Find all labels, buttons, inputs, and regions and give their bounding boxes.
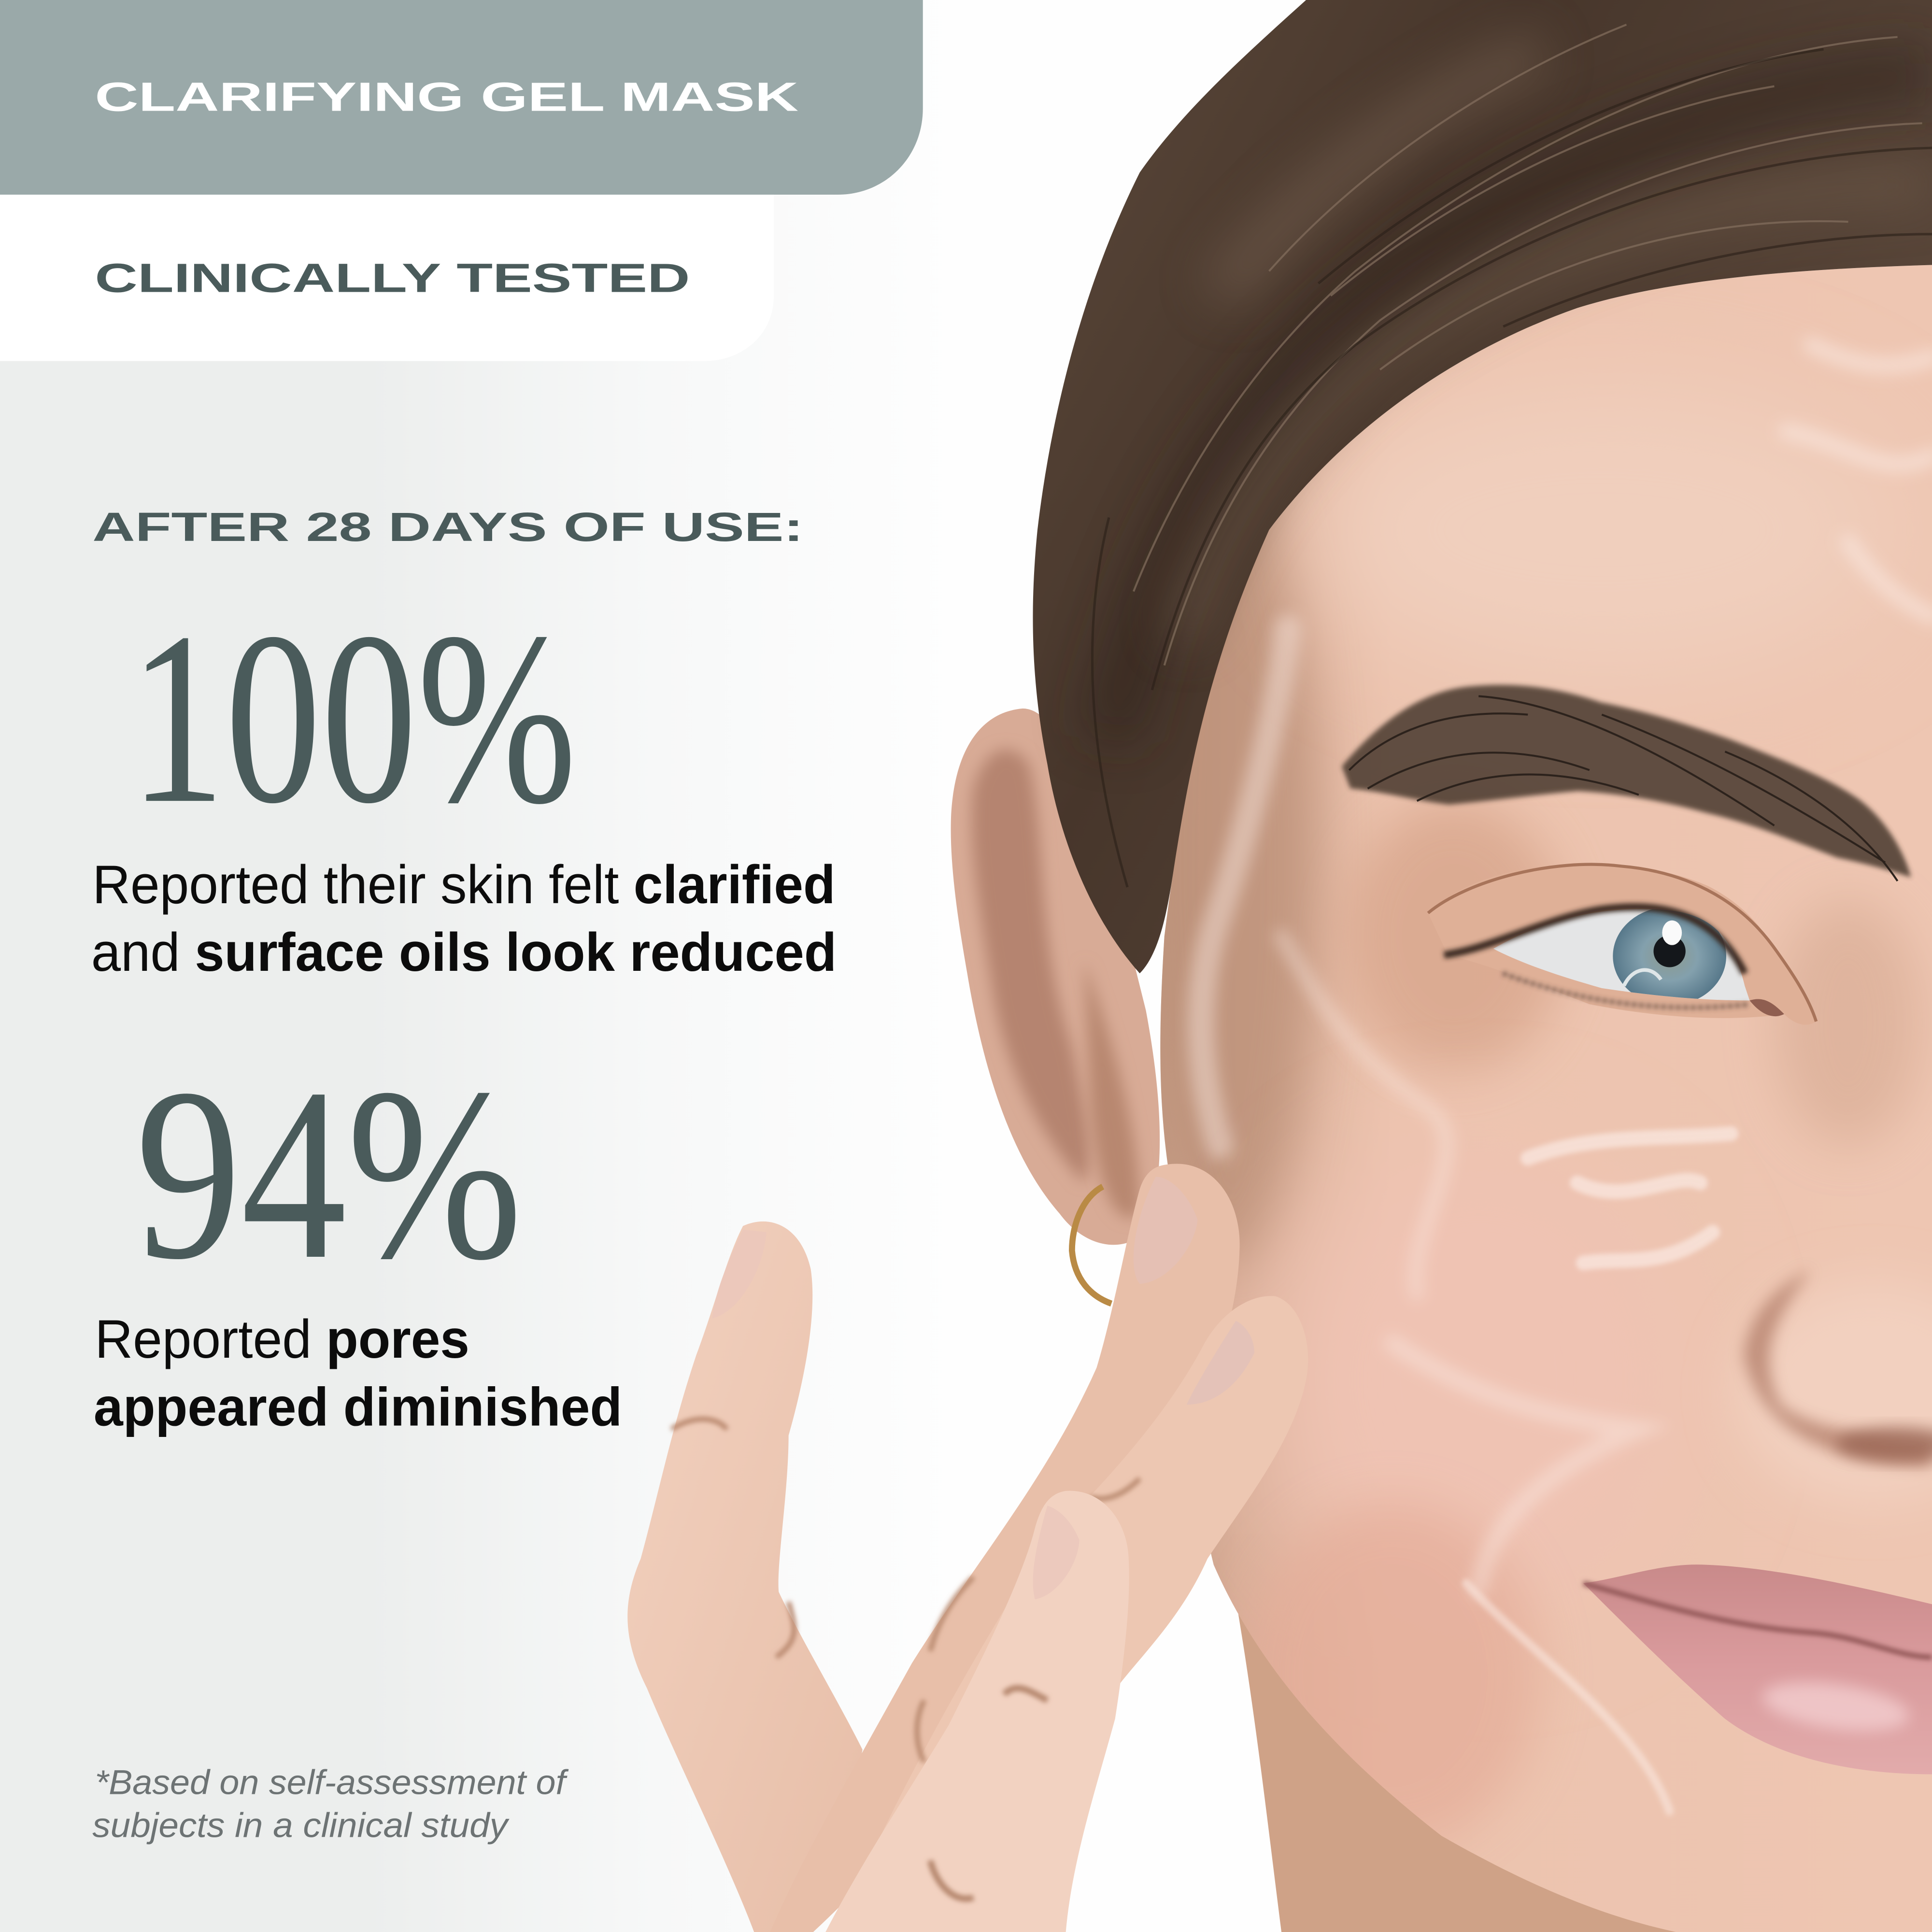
- earring: [1072, 1187, 1111, 1304]
- eyebrow: [1342, 685, 1911, 881]
- text: 94 percent description: [94, 1308, 622, 1437]
- index finger and palm: [627, 1222, 863, 1932]
- face skin: [1146, 265, 1932, 1932]
- lips: [1583, 1564, 1932, 1774]
- heading: clinically tested: CLINICALLY TESTED: [95, 256, 690, 301]
- heading: clarifying gel mask: CLARIFYING GEL MASK: [95, 74, 798, 120]
- hand: [627, 1164, 1308, 1932]
- footnote: subjects in a clinical study: [92, 1806, 510, 1845]
- footnote: *Based on self-assessment of: [95, 1763, 569, 1802]
- panel: product name: [0, 0, 923, 195]
- text: 94 percent description: appeared diminished: [94, 1377, 622, 1437]
- little finger: [825, 1491, 1129, 1932]
- eye: [1428, 865, 1816, 1025]
- photo: woman applying gel mask: [627, 0, 1932, 1932]
- text: 100 percent description: and surface oils look reduced: [91, 922, 837, 982]
- text: 100 percent description: Reported their skin felt clarified: [92, 854, 836, 915]
- stat: 94 percent: 94%: [136, 1037, 523, 1310]
- hair: [1033, 0, 1932, 973]
- middle finger: [770, 1164, 1240, 1932]
- text: 94 percent description: Reported pores: [95, 1308, 469, 1369]
- panel: clinically tested: [0, 195, 774, 361]
- text: 100 percent description: [91, 854, 837, 982]
- ear: [951, 709, 1160, 1245]
- subheading: after 28 days: AFTER 28 DAYS OF USE:: [92, 504, 803, 550]
- ring finger: [838, 1296, 1308, 1932]
- footnote: [92, 1763, 569, 1845]
- gel streaks: [1201, 345, 1932, 1811]
- neck: [1238, 1614, 1725, 1932]
- stat: 100 percent: 100%: [129, 582, 577, 854]
